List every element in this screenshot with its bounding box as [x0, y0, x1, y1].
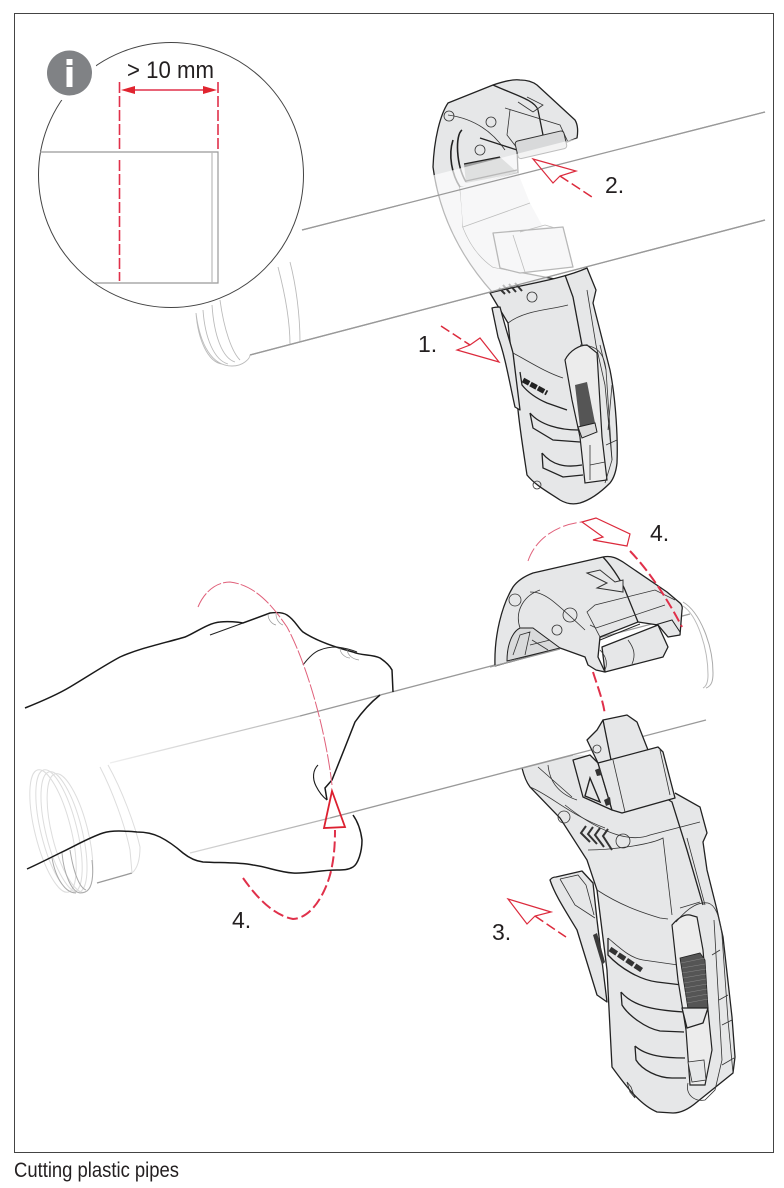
- head details: [603, 557, 638, 622]
- label 2: 2.: [605, 172, 624, 198]
- fade over pipe band: [400, 122, 640, 316]
- grip grooves: [608, 938, 682, 985]
- maker mark: [523, 380, 547, 393]
- head direction mark: [587, 570, 623, 592]
- blade assembly: [603, 715, 648, 770]
- trigger: [492, 307, 520, 410]
- illustration: pipe behind top cutter: [196, 112, 765, 366]
- pipe over body edge: [515, 755, 573, 770]
- caption: Cutting plastic pipes: [14, 1159, 179, 1182]
- cutter body: [522, 755, 735, 1113]
- handle: [490, 268, 617, 504]
- warning label: [585, 778, 600, 802]
- arrow 1: [441, 326, 499, 362]
- cutter head: [495, 556, 682, 672]
- vent chevrons: [581, 826, 612, 850]
- maker mark: [610, 949, 643, 971]
- screw: [627, 1082, 635, 1098]
- grip chevrons: [499, 283, 522, 294]
- blade box: [493, 227, 573, 273]
- pipe end in lens: [40, 152, 218, 283]
- hook interior: [507, 628, 560, 661]
- handle seams and grooves: [565, 275, 582, 345]
- body seams: [649, 788, 703, 905]
- trigger: [550, 871, 607, 1002]
- pipe socket rings: [20, 765, 140, 897]
- arrow 3: [508, 899, 566, 937]
- lower cutter tool: [490, 556, 735, 1113]
- label 1: 1.: [418, 331, 437, 357]
- label 3: 3.: [492, 919, 511, 945]
- arrow 2: [533, 159, 592, 197]
- slider thumb ribs: [680, 953, 708, 1009]
- lens: detail circle: [38, 42, 304, 308]
- inner C assembly: [460, 173, 573, 273]
- arrow 4 left: rotation around pipe: [198, 582, 345, 919]
- lower pipe: [20, 602, 713, 897]
- dimension: greater than 10 mm: > 10 mm: [127, 57, 214, 84]
- hand: [25, 613, 393, 873]
- slider ribs: [575, 382, 595, 427]
- dimension: greater than 10 mm: [120, 57, 218, 281]
- slider slot: [565, 345, 607, 483]
- arrow 4 right: rotation around pipe: [528, 518, 682, 715]
- slider slot: [672, 915, 712, 1085]
- label 4 left: 4.: [232, 907, 251, 933]
- label 4 right: 4.: [650, 520, 669, 546]
- roller: [602, 625, 668, 672]
- top cutter tool: [250, 80, 765, 504]
- icon: information badge: [41, 45, 97, 101]
- cutter head: [433, 80, 578, 300]
